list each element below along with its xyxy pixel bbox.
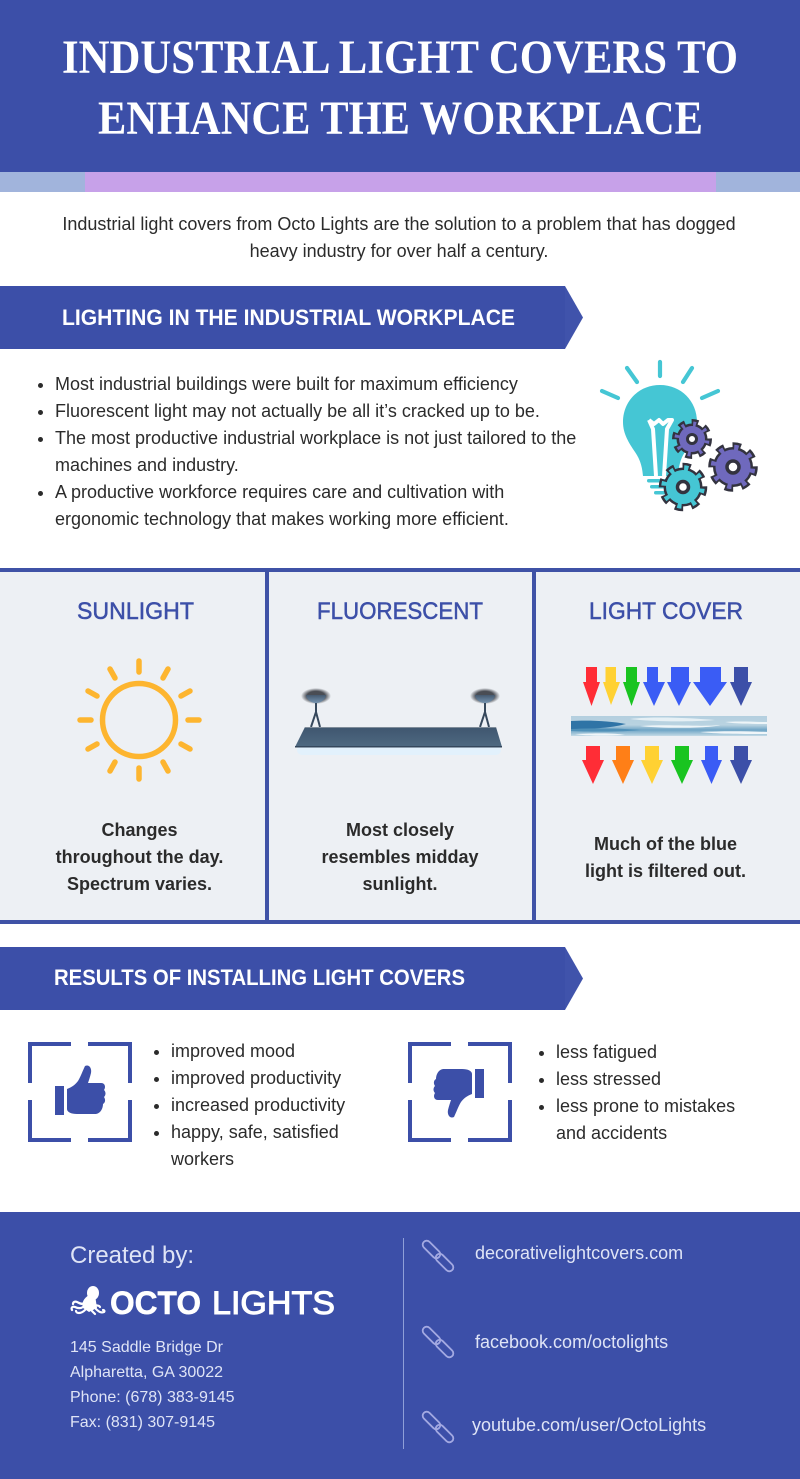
- accent stripe: [0, 172, 800, 192]
- heading: light cover: LIGHT COVER: [589, 598, 743, 625]
- banner heading: lighting: [0, 286, 583, 349]
- header band with title: [0, 0, 800, 172]
- icon: light bulb with gears: [600, 360, 758, 512]
- header band with title: INDUSTRIAL LIGHT COVERS TO: [62, 31, 738, 84]
- panel: light cover: [571, 598, 767, 881]
- link text 1: decorativelightcovers.com: [475, 1243, 683, 1263]
- caption: sunlight: Spectrum varies.: [67, 874, 212, 894]
- lighting bullet list: Most industrial buildings were built for maximum efficiency: [55, 374, 518, 394]
- negative results list: less stressed: [556, 1069, 661, 1089]
- footer: [0, 1212, 800, 1479]
- heading: fluorescent: FLUORESCENT: [317, 598, 483, 625]
- lighting bullet list: The most productive industrial workplace is not just tailored to the machines and industry.: [55, 428, 576, 475]
- icon: fluorescent lamp: [295, 688, 502, 755]
- comparison panel background: [0, 568, 800, 924]
- lighting bullet list: A productive workforce requires care and cultivation with ergonomic technology that makes working more efficient.: [55, 482, 509, 529]
- negative results list: [539, 1042, 735, 1143]
- icon: link 2: [422, 1326, 454, 1358]
- caption: sunlight: Changes: [101, 820, 178, 840]
- caption: sunlight: [56, 820, 223, 894]
- icon: filter band: [571, 716, 767, 736]
- gear: small purple: [676, 422, 708, 456]
- header band with title: ENHANCE THE WORKPLACE: [98, 92, 703, 145]
- banner heading: results: RESULTS OF INSTALLING LIGHT COVERS: [54, 965, 465, 990]
- divider: [403, 1238, 404, 1449]
- logo: octo lights: [70, 1285, 335, 1321]
- caption: light cover: [585, 834, 746, 881]
- icon: thumbs up in frame: [28, 1042, 132, 1142]
- banner heading: results: [0, 947, 583, 1010]
- address: Fax: (831) 307-9145: [70, 1414, 215, 1431]
- positive results list: [154, 1041, 346, 1169]
- banner heading: lighting: LIGHTING IN THE INDUSTRIAL WORKPLACE: [62, 305, 515, 330]
- caption: fluorescent: [321, 820, 479, 894]
- logo: octo lights: LIGHTS: [212, 1285, 335, 1321]
- icon: filtered light arrows: [582, 746, 752, 784]
- address: Alpharetta, GA 30022: [70, 1364, 223, 1381]
- logo: octo lights: OCTO: [110, 1285, 201, 1321]
- negative results list: less fatigued: [556, 1042, 657, 1062]
- intro text: [62, 214, 736, 261]
- positive results list: improved mood: [171, 1041, 295, 1061]
- intro text: heavy industry for over half a century.: [250, 241, 548, 261]
- caption: fluorescent: sunlight.: [362, 874, 438, 894]
- icon: link 1: [422, 1240, 454, 1272]
- negative results list: less prone to mistakes and accidents: [556, 1096, 735, 1143]
- address: Phone: (678) 383-9145: [70, 1389, 235, 1406]
- link text 3: youtube.com/user/OctoLights: [472, 1415, 706, 1435]
- gear: right purple: [712, 446, 754, 488]
- gear: teal: [662, 466, 704, 508]
- lighting bullet list: Fluorescent light may not actually be all it’s cracked up to be.: [55, 401, 540, 421]
- address: 145 Saddle Bridge Dr: [70, 1339, 223, 1356]
- panel: sunlight: [56, 598, 223, 894]
- intro text: Industrial light covers from Octo Lights are the solution to a problem that has dogged: [62, 214, 736, 234]
- link text 2: facebook.com/octolights: [475, 1332, 668, 1352]
- positive results list: improved productivity: [171, 1068, 341, 1088]
- icon: link 3: [422, 1410, 454, 1444]
- caption: light cover: light is filtered out.: [585, 861, 746, 881]
- created by label: Created by:: [70, 1242, 194, 1269]
- lighting bullet list: [38, 374, 576, 529]
- icon: sun: [77, 658, 202, 782]
- panel: fluorescent: [295, 598, 502, 894]
- caption: light cover: Much of the blue: [594, 834, 737, 854]
- positive results list: increased productivity: [171, 1095, 345, 1115]
- heading: sunlight: SUNLIGHT: [77, 598, 194, 625]
- caption: fluorescent: Most closely: [346, 820, 454, 840]
- icon: thumbs down in frame: [408, 1042, 512, 1142]
- icon: incoming light arrows: [583, 667, 752, 706]
- address: [70, 1339, 235, 1431]
- caption: sunlight: throughout the day.: [56, 847, 223, 867]
- positive results list: happy, safe, satisfied workers: [171, 1122, 339, 1169]
- caption: fluorescent: resembles midday: [321, 847, 479, 867]
